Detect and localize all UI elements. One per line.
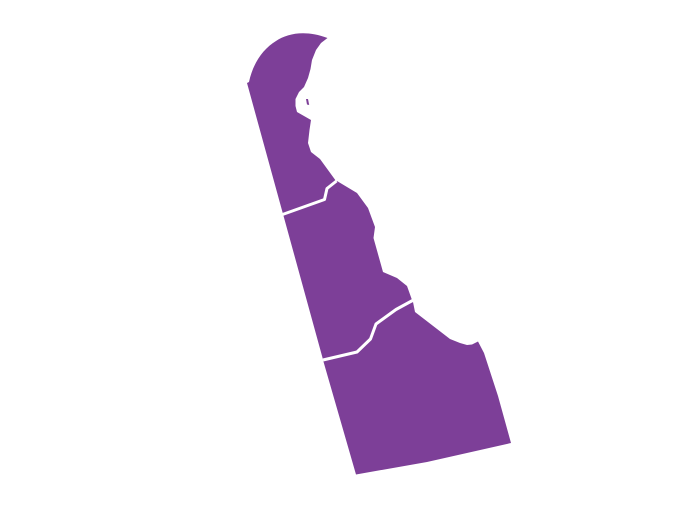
county: Kent (middle) [283,181,412,360]
county: New Castle small island [306,99,309,105]
county: New Castle (north) [247,33,336,214]
county: Sussex (south) [323,302,511,474]
border: New Castle and Kent [282,181,336,214]
border: Kent and Sussex [323,300,412,360]
county borders [282,181,412,360]
